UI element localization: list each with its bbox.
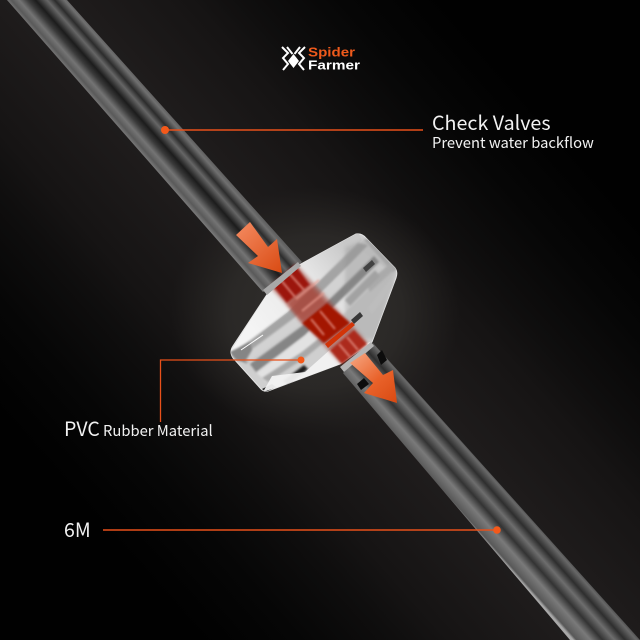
upper tube collar [263, 262, 301, 295]
red section: top [272, 265, 310, 303]
lower tube [343, 343, 640, 640]
callout: 6M length: 6M [64, 514, 91, 543]
arrow: flow out [350, 353, 397, 403]
dark stripe [250, 256, 379, 372]
check valve body [230, 232, 397, 392]
red section: orange band [325, 322, 355, 348]
callout: PVC rubber material: Rubber Material [103, 420, 213, 441]
logo wordmark [308, 44, 360, 72]
red section: middle [302, 303, 350, 343]
red section: middle blur [287, 285, 327, 323]
red section: bottom [330, 330, 367, 364]
upper tube [7, 0, 302, 292]
callout: PVC rubber material: PVC [64, 413, 100, 442]
rim white inner band [246, 272, 343, 362]
black accents [262, 260, 375, 392]
icon: spider [282, 47, 305, 70]
callout: PVC rubber material [64, 356, 304, 442]
callout: check valves: Prevent water backflow [432, 132, 594, 153]
callout: check valves [161, 107, 594, 153]
red inner core [270, 264, 368, 364]
white stripe [257, 263, 388, 382]
left tip shading [230, 342, 252, 362]
lower tube collar [340, 342, 374, 372]
logo wordmark: Farmer [308, 58, 360, 72]
logo wordmark: Spider [308, 44, 355, 60]
fine grey stripe [262, 338, 323, 382]
callout: check valves: Check Valves [432, 107, 551, 136]
upper cone [230, 232, 362, 352]
lower cone white [263, 342, 372, 392]
right cone stripes [345, 238, 397, 340]
logo [282, 44, 360, 72]
pale ribs [280, 272, 358, 357]
rim grey band [232, 243, 368, 364]
callout: 6M length [64, 514, 501, 543]
arrow: flow in [236, 222, 282, 273]
